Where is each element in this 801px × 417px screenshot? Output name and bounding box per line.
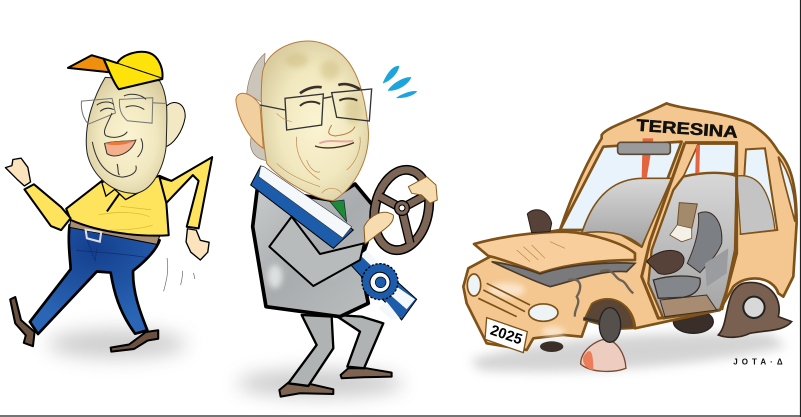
- glasses: [81, 98, 167, 124]
- ear: [236, 93, 263, 148]
- hood scratches: [517, 242, 565, 262]
- upper lip: [105, 140, 136, 145]
- signature: JOTA·Δ: [733, 358, 783, 367]
- seat headrest: [647, 250, 684, 274]
- collar: [102, 176, 144, 200]
- seat cushion right: [705, 248, 728, 287]
- stone orange side: [583, 351, 593, 370]
- sash white stripe: [259, 166, 352, 238]
- windshield: [560, 142, 682, 247]
- license plate: 2025: [488, 323, 524, 348]
- suit jacket: [253, 184, 377, 317]
- left headlight: [467, 274, 481, 296]
- seat back side: [687, 212, 722, 273]
- ground shadow: [470, 333, 787, 372]
- cap seam: [117, 63, 162, 78]
- scalp blotches: [285, 53, 362, 125]
- left sleeve: [24, 184, 71, 230]
- shoes: [10, 297, 158, 352]
- door seat: [648, 173, 737, 318]
- figure: man with sash holding steering wheel: [236, 41, 437, 397]
- tie: [330, 200, 347, 222]
- grille: [478, 283, 530, 317]
- eyes and brows: [300, 84, 360, 106]
- sleeve: [269, 217, 364, 286]
- door pillar: [642, 143, 737, 318]
- rear side window: [683, 144, 736, 177]
- back window: [778, 157, 795, 222]
- rearview mirror: [618, 138, 700, 178]
- front wheel arch: [584, 299, 634, 329]
- hands: [364, 177, 437, 244]
- sash upper: [251, 166, 353, 248]
- interior seats: [582, 178, 672, 247]
- cap brim: [68, 55, 109, 72]
- sweat drops: [383, 66, 417, 98]
- emblem white tear: [670, 225, 692, 242]
- jeans: [30, 225, 160, 334]
- facial features: [92, 94, 146, 177]
- car body: [463, 103, 797, 350]
- mouth and nose lines: [315, 125, 355, 148]
- jeans seams: [76, 239, 146, 261]
- hair: [247, 53, 267, 161]
- roof label: TERESINA: [636, 116, 738, 142]
- rear wheels: [673, 310, 713, 333]
- car with TERESINA roof: [463, 103, 797, 372]
- license plate: [485, 318, 527, 353]
- mouth: [105, 140, 136, 156]
- body highlights: [488, 245, 587, 337]
- steering wheel: [367, 165, 436, 255]
- lower door panel: [660, 295, 717, 317]
- head: [86, 77, 167, 193]
- belt buckle: [86, 229, 101, 242]
- shirt: [66, 176, 171, 236]
- stone under hub: [581, 339, 626, 371]
- right sleeve: [160, 157, 212, 228]
- seat emblem: [670, 203, 697, 242]
- shoes: [279, 368, 392, 397]
- brake drum: [583, 308, 621, 342]
- shirt folds: [98, 206, 153, 230]
- motion lines: [164, 258, 195, 291]
- cap: [104, 52, 163, 89]
- right headlight: [529, 304, 558, 321]
- ear: [165, 102, 185, 147]
- sash lower: [349, 252, 417, 320]
- engine bay: [492, 262, 635, 287]
- shirt placket: [107, 193, 120, 211]
- sash lower white stripes: [360, 250, 415, 320]
- flat rear tire: [718, 282, 792, 337]
- hands: [5, 158, 209, 260]
- glasses: [260, 89, 372, 130]
- head: [261, 41, 368, 201]
- seat cushion: [653, 276, 700, 298]
- hood: [474, 232, 635, 273]
- engine hoses: [568, 270, 633, 317]
- belt: [70, 220, 160, 244]
- trousers: [288, 315, 383, 386]
- rear seat: [737, 176, 775, 234]
- jacket highlights: [268, 264, 338, 288]
- rosette: [362, 264, 398, 300]
- side window: [741, 148, 777, 234]
- ground shadow: [48, 330, 187, 358]
- left side mirror: [527, 210, 552, 233]
- ground shadow: [237, 369, 403, 397]
- wrinkles: [277, 113, 360, 193]
- figure: man in yellow cap walking: [5, 52, 212, 358]
